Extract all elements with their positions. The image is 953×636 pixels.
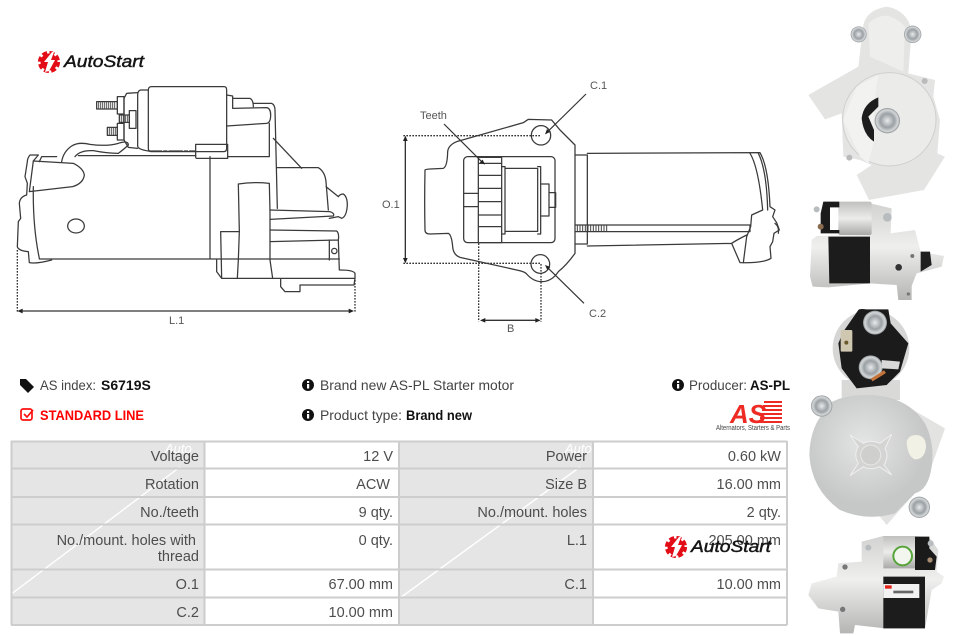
row: teeth and holes: No./mount. holes xyxy=(477,505,587,521)
logo: AS-PL: AS xyxy=(729,399,767,429)
product type: Brand new xyxy=(406,407,472,423)
dimensions and leaders xyxy=(403,94,586,323)
row: O.1 and C.1: C.1 xyxy=(564,577,587,593)
product description: Brand new AS-PL Starter motor xyxy=(320,377,514,393)
row: voltage and power: Voltage xyxy=(151,449,199,465)
row: voltage and power: Power xyxy=(546,449,587,465)
photo: side of starter xyxy=(810,202,944,300)
row: teeth and holes: No./teeth xyxy=(140,505,199,521)
icon: red gear bolt xyxy=(40,52,58,72)
front view technical drawing xyxy=(382,80,779,335)
logo wordmark: AutoStart xyxy=(690,538,773,556)
table background xyxy=(11,441,787,625)
row: rotation and size B: Rotation xyxy=(145,477,199,493)
row: C.2: 10.00 mm xyxy=(329,605,393,621)
row: threaded holes and L.1: thread xyxy=(158,549,199,565)
drawing labels: B xyxy=(507,323,514,335)
row: rotation and size B: 16.00 mm xyxy=(717,477,781,493)
producer: Producer: xyxy=(689,377,747,393)
drive housing xyxy=(217,138,355,292)
row: O.1 and C.1: O.1 xyxy=(176,577,199,593)
icon: info circle xyxy=(302,379,314,391)
label L.1: L.1 xyxy=(169,315,184,327)
photo: opposite side of starter xyxy=(808,536,944,633)
side view technical drawing xyxy=(17,87,355,327)
row: rotation and size B: Size B xyxy=(545,477,587,493)
row: threaded holes and L.1: 205.00 mm xyxy=(708,533,781,549)
bolt hatching xyxy=(99,102,127,135)
drawing labels: Teeth xyxy=(420,110,447,122)
logo: AutoStart top xyxy=(40,52,146,72)
specification table: Auto xyxy=(164,441,192,456)
drawing labels: C.2 xyxy=(589,308,606,320)
photo: front of starter xyxy=(808,7,945,200)
row: O.1 and C.1 xyxy=(176,577,781,593)
row: threaded holes and L.1: 0 qty. xyxy=(359,533,393,549)
info block: producer xyxy=(672,377,790,432)
solenoid xyxy=(97,87,277,208)
row: O.1 and C.1: 10.00 mm xyxy=(717,577,781,593)
mounting plate xyxy=(425,119,575,282)
row: voltage and power: 12 V xyxy=(363,449,393,465)
logo: AS-PL: Alternators, Starters & Parts xyxy=(716,425,790,432)
producer: AS-PL xyxy=(750,377,790,393)
product type: Product type: xyxy=(320,407,402,423)
drawing labels: C.1 xyxy=(590,80,607,92)
row: C.2: C.2 xyxy=(176,605,199,621)
specification table xyxy=(10,441,787,625)
standard line label: STANDARD LINE xyxy=(40,407,144,423)
drawing labels: O.1 xyxy=(382,199,400,211)
row: teeth and holes: 2 qty. xyxy=(747,505,781,521)
row: threaded holes and L.1 xyxy=(57,533,781,565)
threaded rod hatching xyxy=(577,225,607,231)
icon: checked box xyxy=(21,409,33,420)
logo wordmark: AutoStart xyxy=(63,53,146,71)
logo: AS-PL xyxy=(716,399,790,432)
specification table: Auto xyxy=(564,441,592,456)
row: C.2 xyxy=(176,605,393,621)
icon: tags xyxy=(20,379,34,393)
AS index: AS index: xyxy=(40,377,96,393)
row: threaded holes and L.1: No./mount. holes with xyxy=(57,533,196,549)
icon: red gear bolt xyxy=(666,537,686,557)
row: voltage and power xyxy=(151,449,781,465)
icon: info circle xyxy=(672,379,684,391)
drawing labels xyxy=(382,80,607,335)
AS index: S6719S xyxy=(101,377,151,393)
row: rotation and size B: ACW xyxy=(356,477,390,493)
logo: AutoStart watermark xyxy=(666,537,773,557)
info block: index and line xyxy=(20,377,151,423)
row: teeth and holes: 9 qty. xyxy=(359,505,393,521)
icon: info circle xyxy=(302,409,314,421)
pinion window xyxy=(464,157,556,243)
row: rotation and size B xyxy=(145,477,781,493)
row: O.1 and C.1: 67.00 mm xyxy=(329,577,393,593)
row: voltage and power: 0.60 kW xyxy=(728,449,781,465)
photo: rear of starter xyxy=(809,309,945,525)
mounting holes xyxy=(531,126,551,273)
dimension L.1 xyxy=(17,250,355,313)
motor xyxy=(576,153,779,263)
row: teeth and holes xyxy=(140,505,781,521)
row: threaded holes and L.1: L.1 xyxy=(567,533,587,549)
motor body and cap xyxy=(17,142,339,263)
info block: product xyxy=(302,377,514,423)
